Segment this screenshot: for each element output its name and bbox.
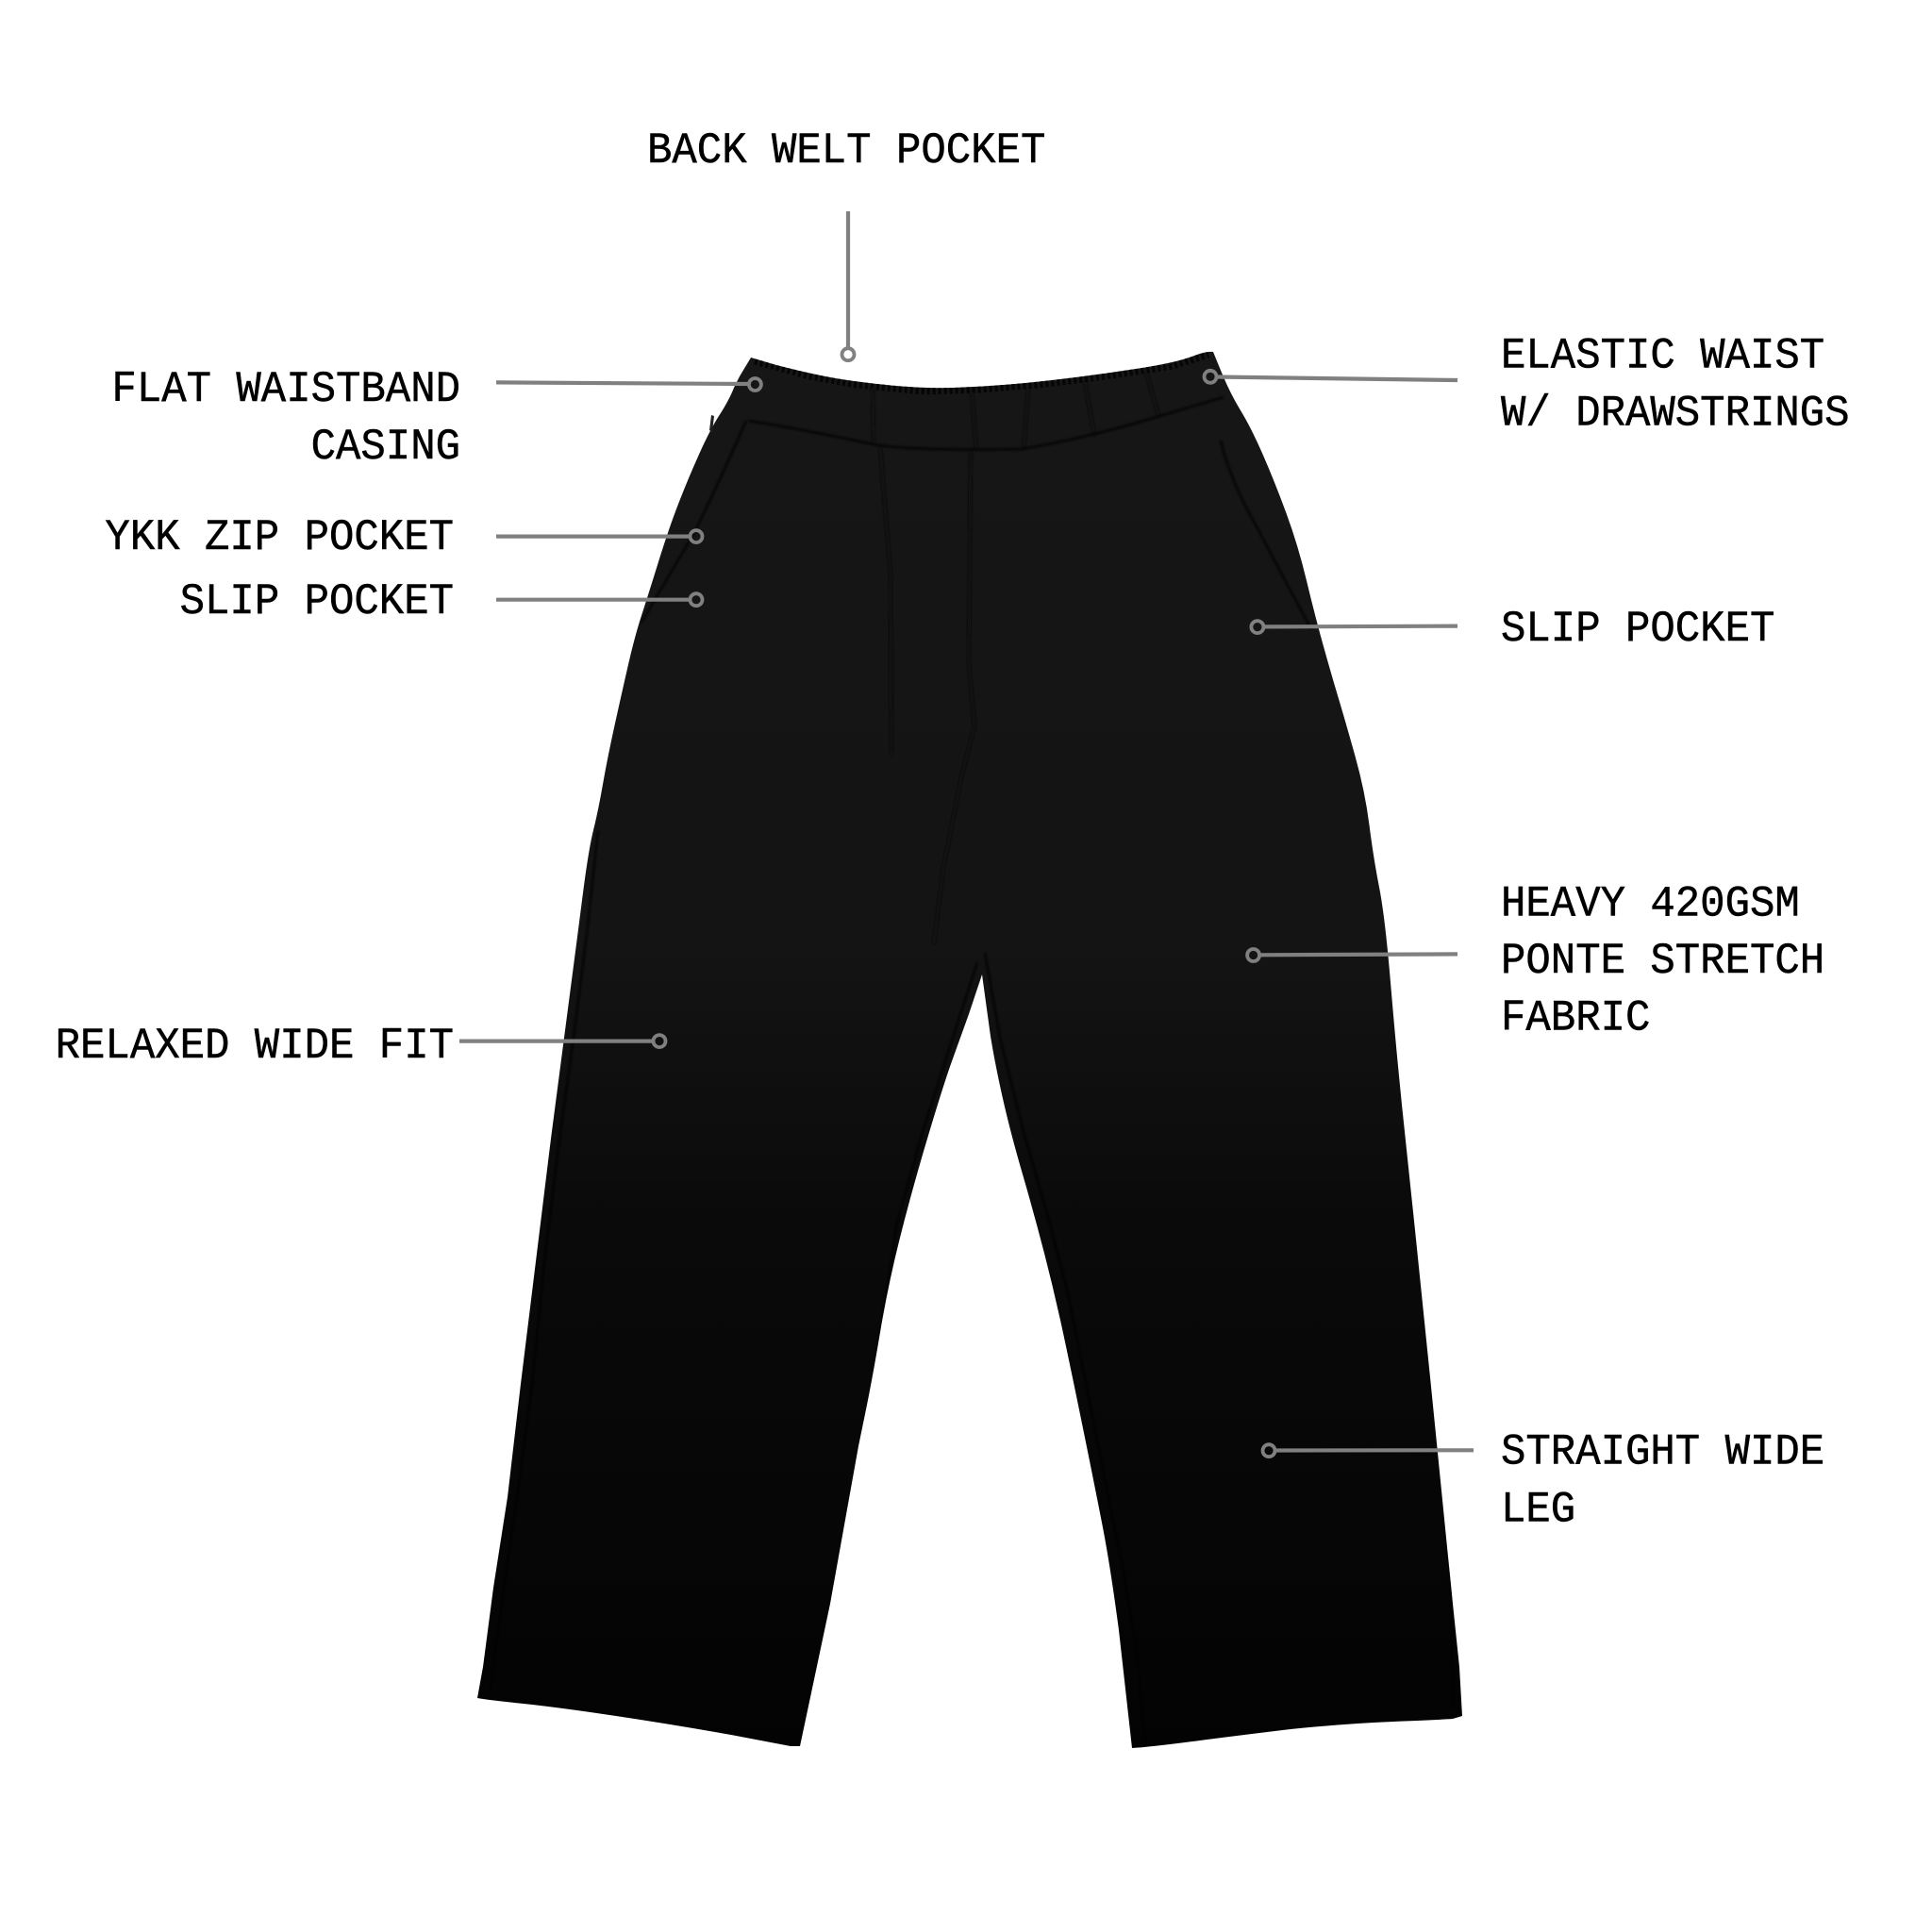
leader line <box>496 530 702 542</box>
callout: slip pocket right <box>1251 604 1774 654</box>
leader line <box>496 378 761 391</box>
label: FLAT WAISTBAND <box>111 364 460 414</box>
label: STRAIGHT WIDE <box>1501 1427 1824 1477</box>
callout: heavy ponte stretch fabric <box>1247 879 1824 1043</box>
infographic canvas <box>58 132 1848 1748</box>
label: BACK WELT POCKET <box>647 125 1045 175</box>
label: W/ DRAWSTRINGS <box>1501 389 1850 439</box>
leader line <box>496 593 702 606</box>
pleat and centre seams <box>880 447 974 943</box>
leader line <box>1262 1444 1474 1457</box>
callout: slip pocket left <box>180 576 702 626</box>
callout: back welt pocket <box>647 125 1045 360</box>
callout: ykk zip pocket <box>105 512 703 562</box>
label: LEG <box>1501 1485 1575 1535</box>
pants illustration <box>477 352 1462 1748</box>
label: HEAVY 420GSM <box>1501 879 1800 929</box>
callout: relaxed wide fit <box>56 1021 666 1071</box>
leader line <box>1204 371 1457 383</box>
label <box>111 364 460 472</box>
leader line <box>1251 621 1457 633</box>
label: PONTE STRETCH <box>1501 936 1824 986</box>
label <box>1501 879 1824 1043</box>
callout: flat waistband casing <box>111 364 761 472</box>
fabric shading and seams <box>528 352 1457 1607</box>
outer seams and waist seam <box>568 396 1453 1607</box>
zip pull tab <box>709 415 714 432</box>
label: ELASTIC WAIST <box>1501 330 1824 381</box>
label: CASING <box>311 422 460 472</box>
leader line <box>841 211 855 360</box>
label: SLIP POCKET <box>1501 604 1774 654</box>
label: FABRIC <box>1501 992 1650 1043</box>
label: SLIP POCKET <box>180 576 454 626</box>
callout: elastic waist with drawstrings <box>1204 330 1850 439</box>
callout: straight wide leg <box>1262 1427 1824 1535</box>
leader line <box>1247 949 1457 961</box>
leader line <box>459 1035 666 1047</box>
label: RELAXED WIDE FIT <box>56 1021 454 1071</box>
elastic gathers <box>755 355 1208 391</box>
pants silhouette <box>477 352 1462 1748</box>
label <box>1501 330 1850 439</box>
waistband folds <box>873 373 1158 449</box>
label <box>1501 1427 1824 1535</box>
label: YKK ZIP POCKET <box>105 512 454 562</box>
